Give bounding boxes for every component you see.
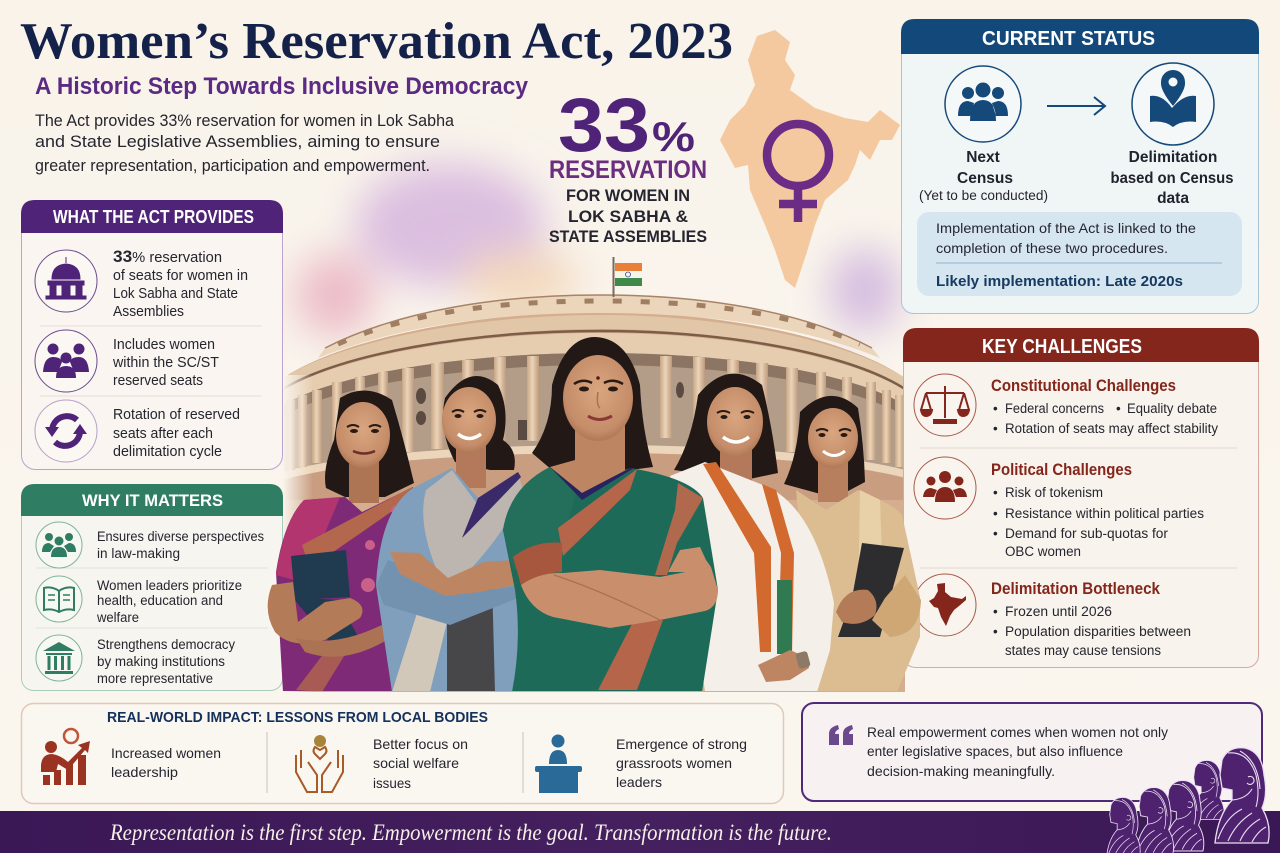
panel text: Rotation of reserved	[113, 407, 240, 423]
parapet	[318, 295, 880, 358]
delimitation bottleneck text: states may cause tensions	[1005, 643, 1161, 658]
implementation note: Likely implementation: Late 2020s	[936, 273, 1183, 290]
panel text: delimitation cycle	[113, 444, 222, 460]
main mass	[283, 312, 905, 692]
panel text: welfare	[96, 610, 139, 625]
entablature	[283, 333, 905, 405]
panel text: Lok Sabha and State	[113, 286, 238, 302]
impact text	[111, 736, 747, 791]
icon: leadership growth chart	[41, 729, 90, 785]
icon: india map	[914, 574, 976, 636]
callout: 33% reservation: FOR WOMEN IN	[566, 186, 690, 205]
intro paragraph: The Act provides 33% reservation for women in Lok Sabha	[35, 111, 455, 130]
cornice	[283, 315, 905, 392]
panel text: by making institutions	[97, 654, 225, 669]
implementation note	[917, 212, 1242, 296]
icon: speaker at podium	[535, 734, 582, 793]
arrow	[1047, 97, 1105, 115]
constitutional challenges text: Federal concerns	[1005, 401, 1104, 416]
political challenges text: Resistance within political parties	[1005, 506, 1204, 521]
panel: key challenges	[903, 328, 1259, 668]
woman 2 in blue saree	[376, 376, 524, 692]
political challenges text: •	[993, 485, 998, 500]
icon: female symbol	[767, 124, 829, 222]
panel header: CURRENT STATUS	[982, 28, 1155, 50]
woman 1 in magenta saree	[268, 390, 420, 692]
woman 4 in white kurta with tricolour stole	[670, 374, 834, 692]
woman 5 in beige kurta	[784, 396, 921, 692]
political challenges text: Political Challenges	[991, 461, 1132, 479]
panel header	[903, 328, 1259, 362]
subtitle: A Historic Step Towards Inclusive Democracy	[35, 73, 529, 100]
panel text: more representative	[97, 671, 213, 686]
steps text: (Yet to be conducted)	[919, 188, 1048, 203]
icon: institution	[36, 635, 82, 681]
delimitation bottleneck text: Population disparities between	[1005, 624, 1191, 639]
callout: 33% reservation	[549, 83, 707, 246]
steps text: based on Census	[1110, 170, 1234, 187]
icon: indian flag	[612, 257, 642, 297]
steps text: Delimitation	[1129, 149, 1217, 166]
constitutional challenges text: •	[1116, 401, 1121, 416]
icon: open book	[36, 576, 82, 622]
title: Women’s Reservation Act, 2023	[20, 13, 733, 70]
callout: 33% reservation: LOK SABHA &	[568, 207, 688, 226]
watercolor background washes	[295, 163, 901, 337]
panel text: reserved seats	[113, 373, 203, 389]
panel text	[96, 529, 264, 686]
intro paragraph: greater representation, participation and empowerment.	[35, 156, 430, 175]
panel text: in law-making	[97, 546, 180, 561]
callout: 33% reservation: 33	[558, 83, 650, 168]
panel: what the act provides	[21, 200, 283, 470]
footer band	[0, 811, 1280, 853]
impact text: Better focus on	[373, 736, 468, 752]
panel text	[112, 247, 248, 460]
panel: quote	[802, 703, 1262, 801]
impact text: social welfare	[373, 755, 459, 771]
panel header: WHAT THE ACT PROVIDES	[53, 207, 254, 227]
impact text: grassroots women	[616, 755, 732, 771]
panel text: Ensures diverse perspectives	[97, 529, 264, 544]
panel text: health, education and	[97, 593, 223, 608]
quote text	[867, 724, 1168, 779]
constitutional challenges text: Rotation of seats may affect stability	[1005, 421, 1218, 436]
panel: why it matters	[21, 484, 283, 690]
illustration: group of five women	[268, 337, 921, 692]
footer band: Representation is the first step. Empowerment is the goal. Transformation is the future.	[109, 820, 832, 845]
quote text: Real empowerment comes when women not only	[867, 724, 1168, 740]
icon: map pin and book	[1132, 63, 1214, 145]
political challenges text	[991, 461, 1204, 559]
quote text: decision-making meaningfully.	[867, 763, 1055, 779]
delimitation bottleneck text: •	[993, 604, 998, 619]
woman 3 in green saree (centre)	[503, 337, 718, 692]
constitutional challenges text	[991, 377, 1218, 436]
panel text: Assemblies	[113, 304, 184, 320]
delimitation bottleneck text: •	[993, 624, 998, 639]
panel header	[21, 484, 283, 516]
political challenges text: Risk of tokenism	[1005, 485, 1103, 500]
panel text: within the SC/ST	[112, 355, 219, 371]
impact text: issues	[373, 775, 411, 791]
implementation note: completion of these two procedures.	[936, 240, 1168, 256]
political challenges text: •	[993, 506, 998, 521]
panel header: WHY IT MATTERS	[82, 491, 223, 510]
map of India with female symbol	[720, 30, 900, 288]
callout: 33% reservation: %	[652, 113, 695, 160]
panel text: of seats for women in	[113, 268, 248, 284]
illustration: women silhouettes	[1107, 748, 1269, 853]
delimitation bottleneck text	[991, 580, 1191, 658]
quote text: enter legislative spaces, but also influence	[867, 743, 1123, 759]
icon: quotation mark	[829, 725, 853, 745]
delimitation bottleneck text: Delimitation Bottleneck	[991, 580, 1161, 598]
steps text: Next	[966, 149, 1000, 166]
panel header	[901, 19, 1259, 54]
icon: rotation arrows	[35, 400, 97, 462]
panel header: KEY CHALLENGES	[982, 336, 1142, 358]
icon: parliament dome	[35, 250, 97, 312]
panel text: Includes women	[113, 337, 215, 353]
windows	[416, 382, 684, 440]
panel text: Strengthens democracy	[97, 637, 235, 652]
panel: current status	[901, 19, 1259, 314]
political challenges text: Demand for sub-quotas for	[1005, 526, 1169, 541]
political challenges text: OBC women	[1005, 544, 1081, 559]
panel text: 33% reservation	[113, 247, 222, 266]
parliament building	[283, 295, 905, 695]
intro paragraph: and State Legislative Assemblies, aiming to ensure	[35, 132, 440, 151]
interior wall	[283, 353, 905, 472]
plinth	[283, 445, 905, 480]
icon: caring hands	[296, 735, 343, 792]
constitutional challenges text: •	[993, 421, 998, 436]
delimitation bottleneck text: Frozen until 2026	[1005, 604, 1112, 619]
icon: scales of justice	[914, 374, 976, 436]
impact text: Increased women	[111, 745, 221, 761]
political challenges text: •	[993, 526, 998, 541]
callout: 33% reservation: RESERVATION	[549, 156, 707, 184]
panel text: seats after each	[113, 426, 213, 442]
icon: political group	[914, 457, 976, 519]
impact text: Emergence of strong	[616, 736, 747, 752]
panel header	[21, 200, 283, 233]
impact text: leaders	[616, 774, 662, 790]
panel text: Women leaders prioritize	[97, 578, 242, 593]
constitutional challenges text: Equality debate	[1127, 401, 1217, 416]
panel: real-world impact	[22, 704, 784, 804]
icon: group of people	[35, 330, 97, 392]
icon: diverse group	[36, 522, 82, 568]
panel heading: REAL-WORLD IMPACT: LESSONS FROM LOCAL BODIES	[107, 709, 488, 726]
callout: 33% reservation: STATE ASSEMBLIES	[549, 227, 707, 246]
implementation note: Implementation of the Act is linked to the	[936, 220, 1196, 236]
steps text: data	[1157, 190, 1189, 207]
steps text: Census	[957, 170, 1013, 187]
icon: census people	[945, 66, 1021, 142]
steps text	[919, 149, 1234, 207]
colonnade	[286, 356, 904, 470]
constitutional challenges text: Constitutional Challenges	[991, 377, 1176, 395]
constitutional challenges text: •	[993, 401, 998, 416]
intro paragraph	[35, 111, 455, 175]
impact text: leadership	[111, 764, 178, 780]
